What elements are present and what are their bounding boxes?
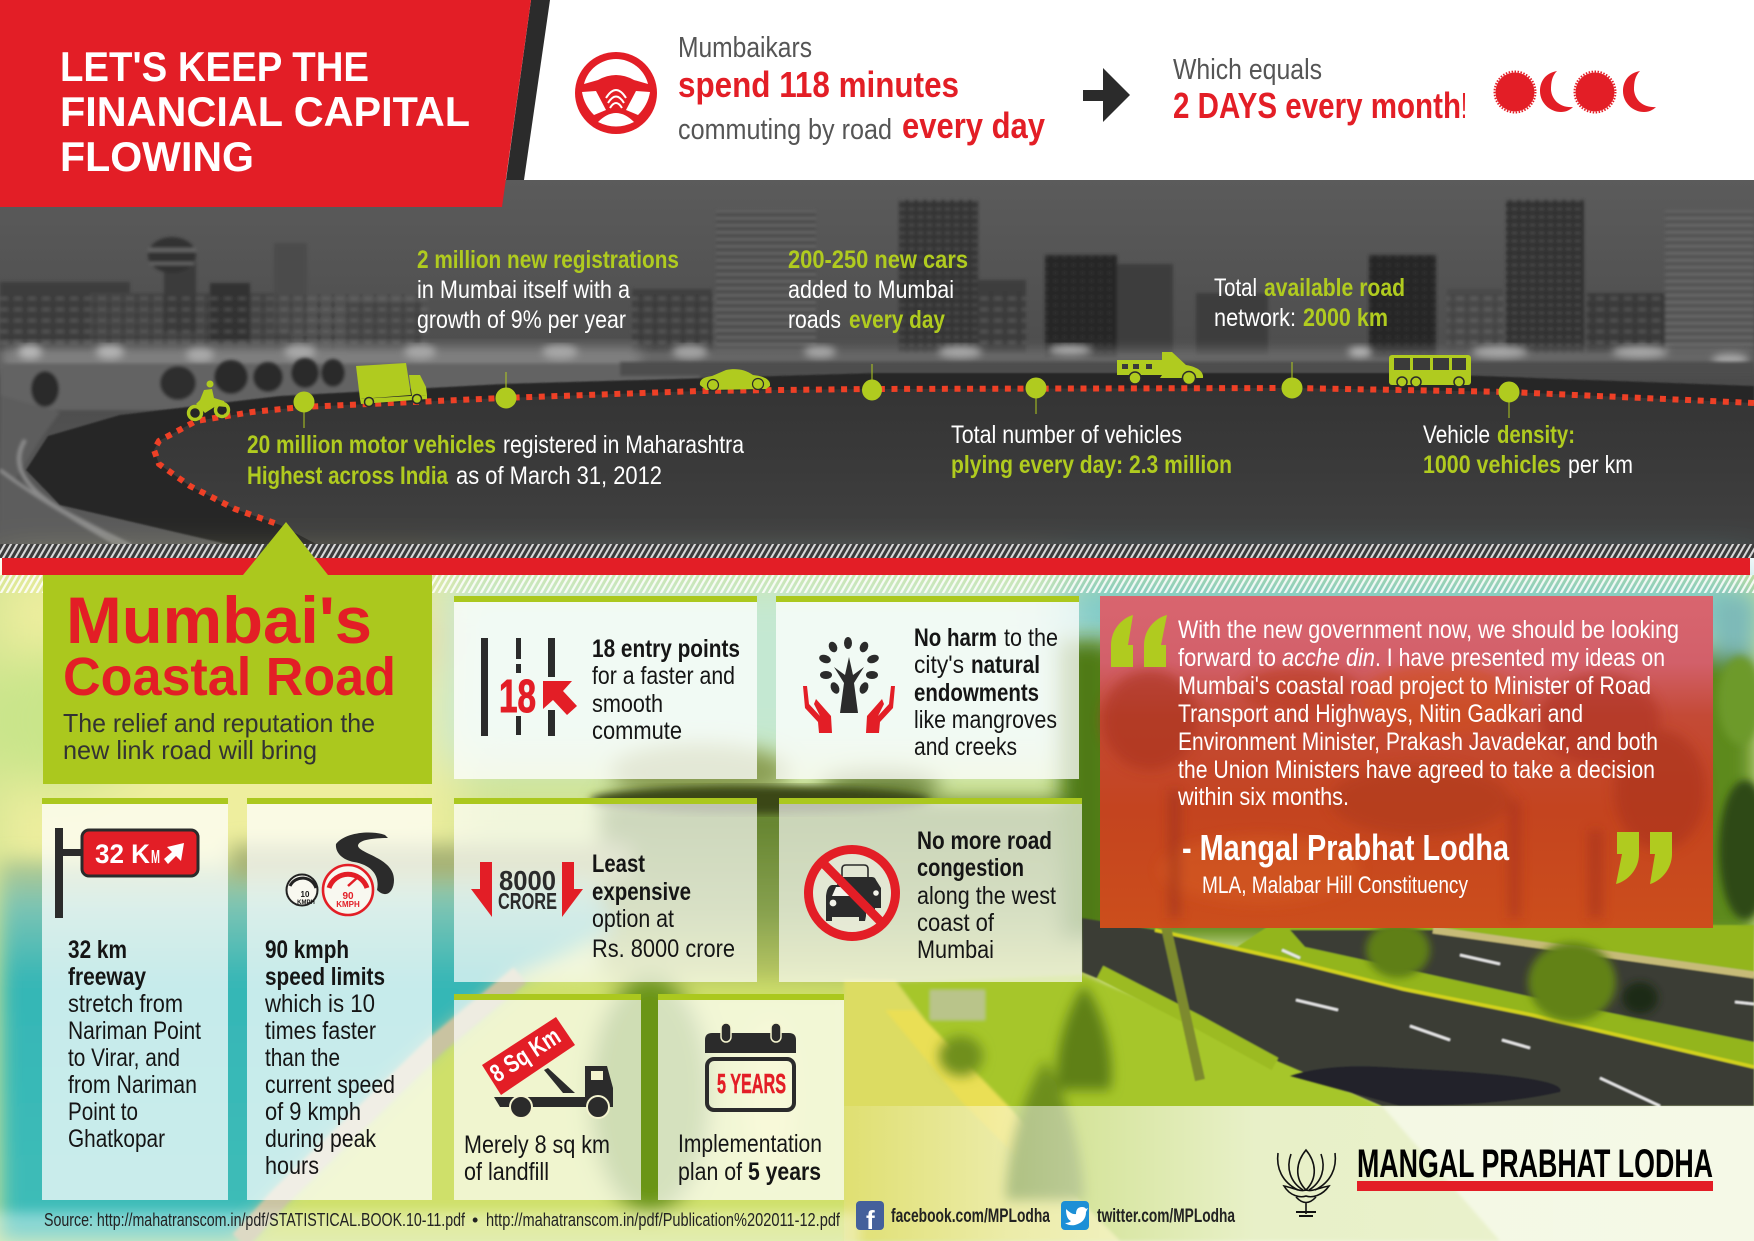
text: option at — [592, 905, 674, 933]
panel: quote — [1100, 596, 1713, 928]
title: FINANCIAL CAPITAL — [60, 88, 470, 135]
text: 200-250 new cars: every day — [849, 306, 945, 334]
icon: 8000 crore with arrows: 8000 — [499, 865, 556, 896]
quote text: Environment Minister, Prakash Javadekar, and both — [1178, 728, 1658, 756]
text: available road network: 2000 km — [1303, 304, 1388, 332]
text: coast of — [917, 909, 994, 937]
quote text: With the new government now, we should be looking — [1178, 616, 1679, 644]
panel: Mumbai's Coastal Road heading — [43, 522, 432, 784]
text: 18 entry points — [592, 635, 740, 663]
text: of 9 kmph — [265, 1098, 361, 1126]
closing quote mark — [1616, 832, 1672, 884]
text: vehicle density: Vehicle — [1423, 421, 1490, 449]
text: 20 million motor vehicles: Highest across India — [247, 462, 449, 490]
text: total number of vehicles: plying every day: 2.3 million — [951, 451, 1232, 479]
shore trees and grey carriageway — [0, 358, 1754, 546]
icon: lanes with entry arrow — [481, 638, 577, 736]
icon: facebook — [856, 1201, 884, 1235]
icon: road sign: M — [151, 847, 160, 867]
text: current speed — [265, 1071, 395, 1099]
text: Implementation — [678, 1130, 822, 1158]
text: 200-250 new cars — [788, 246, 968, 334]
quote text: forward to — [1178, 644, 1276, 672]
quote text: within six months. — [1177, 783, 1349, 811]
icon: pickup truck — [1117, 352, 1203, 384]
heading: Coastal Road — [63, 647, 396, 707]
grass and dual carriageway — [1082, 900, 1754, 1106]
text: speed limits — [265, 963, 385, 991]
text: 2 million new registrations: in Mumbai itself with a — [417, 276, 630, 304]
text: available road network: network: — [1214, 304, 1296, 332]
text: for a faster and — [592, 662, 735, 690]
text — [592, 850, 735, 963]
text: daily commute: every day — [902, 105, 1045, 146]
text: hours — [265, 1152, 319, 1180]
text: Rs. 8000 crore — [592, 935, 735, 963]
text: 200-250 new cars: 200-250 new cars — [788, 246, 968, 274]
arrow — [1083, 68, 1130, 122]
text: smooth — [592, 690, 663, 718]
trees on lawn — [939, 985, 1112, 1200]
text: daily commute: commuting by road — [678, 114, 892, 146]
text: 5 years — [748, 1158, 821, 1186]
dotted road route — [154, 388, 1754, 525]
route markers — [294, 362, 1519, 428]
panel: 32 km freeway — [42, 798, 228, 1200]
source line: Source: http://mahatranscom.in/pdf/STATISTICAL.BOOK.10-11.pdf — [44, 1210, 466, 1230]
text: 2 million new registrations — [417, 246, 679, 334]
tree canopy between cards — [590, 786, 930, 814]
lawn and walkway — [844, 975, 1500, 1241]
text: 2 million new registrations: growth of 9% per year — [417, 306, 626, 334]
panel: implementation plan — [658, 994, 844, 1200]
panel: 18 entry points — [454, 596, 757, 779]
quote text: Mumbai's coastal road project to Minister of Road — [1178, 672, 1651, 700]
hatched strip on photo — [0, 575, 1754, 593]
top white band — [0, 0, 1754, 180]
text — [264, 936, 395, 1180]
background photo of the coastal road — [0, 575, 1754, 1241]
text: freeway — [68, 963, 146, 991]
quote text: acche din — [1282, 644, 1375, 672]
text: and creeks — [914, 733, 1017, 761]
icon: lotus — [1278, 1150, 1335, 1216]
title banner — [0, 0, 531, 207]
text: to Virar, and — [68, 1044, 180, 1072]
panel: landfill — [454, 994, 641, 1200]
text — [678, 1130, 822, 1186]
text: times faster — [265, 1017, 376, 1045]
skyline buildings — [0, 200, 1754, 357]
heading: Mumbai's — [66, 583, 372, 657]
text: 2 million new registrations: 2 million new registrations — [417, 246, 679, 274]
panel: least expensive — [454, 798, 757, 982]
promenade lights — [0, 346, 1754, 370]
text: expensive — [592, 878, 691, 906]
text: of landfill — [464, 1158, 549, 1186]
text: which equals: ! — [1461, 85, 1467, 126]
title — [60, 43, 470, 180]
text: which is 10 — [264, 990, 375, 1018]
text: stretch from — [68, 990, 183, 1018]
text: than the — [265, 1044, 340, 1072]
white bottom band — [844, 1106, 1754, 1241]
text: vehicle density: density: — [1497, 421, 1575, 449]
source line: • — [472, 1210, 478, 1230]
dark sea — [154, 388, 1754, 546]
icon: lanes with entry arrow: 18 — [499, 670, 536, 722]
icon: dump truck — [482, 1017, 613, 1118]
subheading: new link road will bring — [63, 735, 317, 765]
red divider bar — [2, 558, 1750, 575]
text: vehicle density: per km — [1568, 451, 1633, 479]
text: plan of — [678, 1158, 742, 1186]
icon: road sign: 32 K — [95, 839, 150, 869]
text: daily commute — [678, 32, 1045, 146]
panel: no harm — [776, 596, 1079, 779]
title: FLOWING — [60, 133, 254, 180]
icon: road sign — [55, 828, 198, 918]
icon: winding road with gauges: 10 — [301, 890, 310, 899]
icon: twitter — [1061, 1201, 1089, 1230]
text — [68, 936, 201, 1153]
text: 20 million motor vehicles: 20 million motor vehicles — [247, 431, 496, 459]
text: 90 kmph — [265, 936, 349, 964]
quote attribution: - Mangal Prabhat Lodha — [1182, 827, 1510, 868]
icon: motorcycle — [188, 380, 228, 420]
icon: winding road with gauges: 90 — [342, 891, 354, 902]
icon: 8000 crore with arrows — [471, 862, 583, 917]
text: No harm — [914, 624, 997, 652]
icon: delivery truck — [356, 363, 427, 406]
dark slanted stripe — [506, 0, 550, 180]
quote attribution — [1182, 827, 1510, 899]
subheading — [63, 708, 375, 765]
text: 32 km — [68, 936, 127, 964]
text: Nariman Point — [68, 1017, 201, 1045]
pale wash behind source line — [0, 1212, 860, 1241]
city skyline panel — [0, 180, 1754, 546]
text: No more road — [917, 827, 1052, 855]
text: available road network: Total — [1214, 274, 1257, 302]
icon: calendar — [705, 1023, 796, 1110]
twitter handle: twitter.com/MPLodha — [1097, 1206, 1235, 1227]
text: 20 million motor vehicles: as of March 31, 2012 — [456, 462, 662, 490]
panel: no more road congestion — [779, 798, 1082, 982]
text: daily commute: spend 118 minutes — [678, 64, 959, 105]
text: daily commute: Mumbaikars — [678, 32, 812, 64]
text: like mangroves — [914, 706, 1057, 734]
text: Point to — [68, 1098, 138, 1126]
text: 20 million motor vehicles — [247, 431, 744, 490]
text: 20 million motor vehicles: registered in Maharashtra — [503, 431, 744, 459]
text: which equals — [1173, 54, 1467, 126]
text: Ghatkopar — [68, 1125, 165, 1153]
text — [914, 624, 1058, 761]
quote attribution: MLA, Malabar Hill Constituency — [1202, 872, 1468, 899]
text — [917, 827, 1056, 964]
text: to the — [1004, 624, 1058, 652]
text: vehicle density: 1000 vehicles — [1423, 451, 1561, 479]
text: Mumbai — [917, 936, 994, 964]
text: along the west — [917, 882, 1056, 910]
icon: bus — [1389, 355, 1471, 387]
text: Least — [592, 850, 646, 878]
text: from Nariman — [68, 1071, 197, 1099]
tree tints in quote — [1102, 664, 1706, 918]
text: commute — [592, 717, 682, 745]
icon: winding road with gauges — [286, 832, 394, 915]
text: total number of vehicles — [951, 421, 1232, 479]
icon: suns and moons — [1494, 71, 1656, 112]
text: 200-250 new cars: added to Mumbai — [788, 276, 954, 304]
icon: tree in hands — [803, 637, 895, 733]
icon: winding road with gauges: KMPH — [336, 900, 360, 909]
text: congestion — [917, 854, 1024, 882]
text: Merely 8 sq km — [464, 1131, 610, 1159]
text: which equals: Which equals — [1173, 54, 1322, 86]
source line: http://mahatranscom.in/pdf/Publication%202011-12.pdf — [486, 1210, 841, 1230]
text: 200-250 new cars: roads — [788, 306, 841, 334]
quote text: . I have presented my ideas on — [1375, 644, 1665, 672]
text: natural — [971, 651, 1040, 679]
icon: dump truck: 8 Sq Km — [485, 1022, 566, 1088]
icon: winding road with gauges: KMPH — [297, 900, 315, 906]
icon: car — [700, 369, 770, 390]
sea wall rocks — [26, 373, 1754, 546]
facebook handle: facebook.com/MPLodha — [891, 1206, 1050, 1227]
icon: steering wheel — [575, 52, 657, 134]
icon: facebook: f — [866, 1205, 875, 1235]
quote text: the Union Ministers have agreed to take a decision — [1178, 756, 1655, 784]
panel: 90 kmph speed limits — [247, 798, 432, 1200]
text: total number of vehicles: Total number of vehicles — [951, 421, 1182, 449]
text — [464, 1131, 610, 1186]
text: city's — [914, 651, 964, 679]
icon: calendar: 5 YEARS — [717, 1068, 786, 1099]
roadside trees — [1366, 656, 1754, 1022]
source line — [44, 1210, 841, 1230]
text: vehicle density — [1423, 421, 1633, 479]
text: which equals: 2 DAYS every month — [1173, 85, 1461, 126]
hatched strip on dark — [0, 544, 1754, 558]
icon: no cars sign — [808, 850, 896, 936]
title: LET'S KEEP THE — [60, 43, 369, 90]
icon: 8000 crore with arrows: CRORE — [498, 888, 557, 914]
subheading: The relief and reputation the — [63, 708, 375, 738]
text: available road network: available road — [1264, 274, 1405, 302]
quote text — [1177, 616, 1679, 811]
text: available road network — [1214, 274, 1405, 332]
text: endowments — [914, 679, 1039, 707]
heading — [63, 583, 396, 707]
quote text: Transport and Highways, Nitin Gadkari and — [1178, 700, 1583, 728]
text — [592, 635, 740, 745]
text: during peak — [265, 1125, 376, 1153]
opening quote mark — [1111, 615, 1167, 667]
